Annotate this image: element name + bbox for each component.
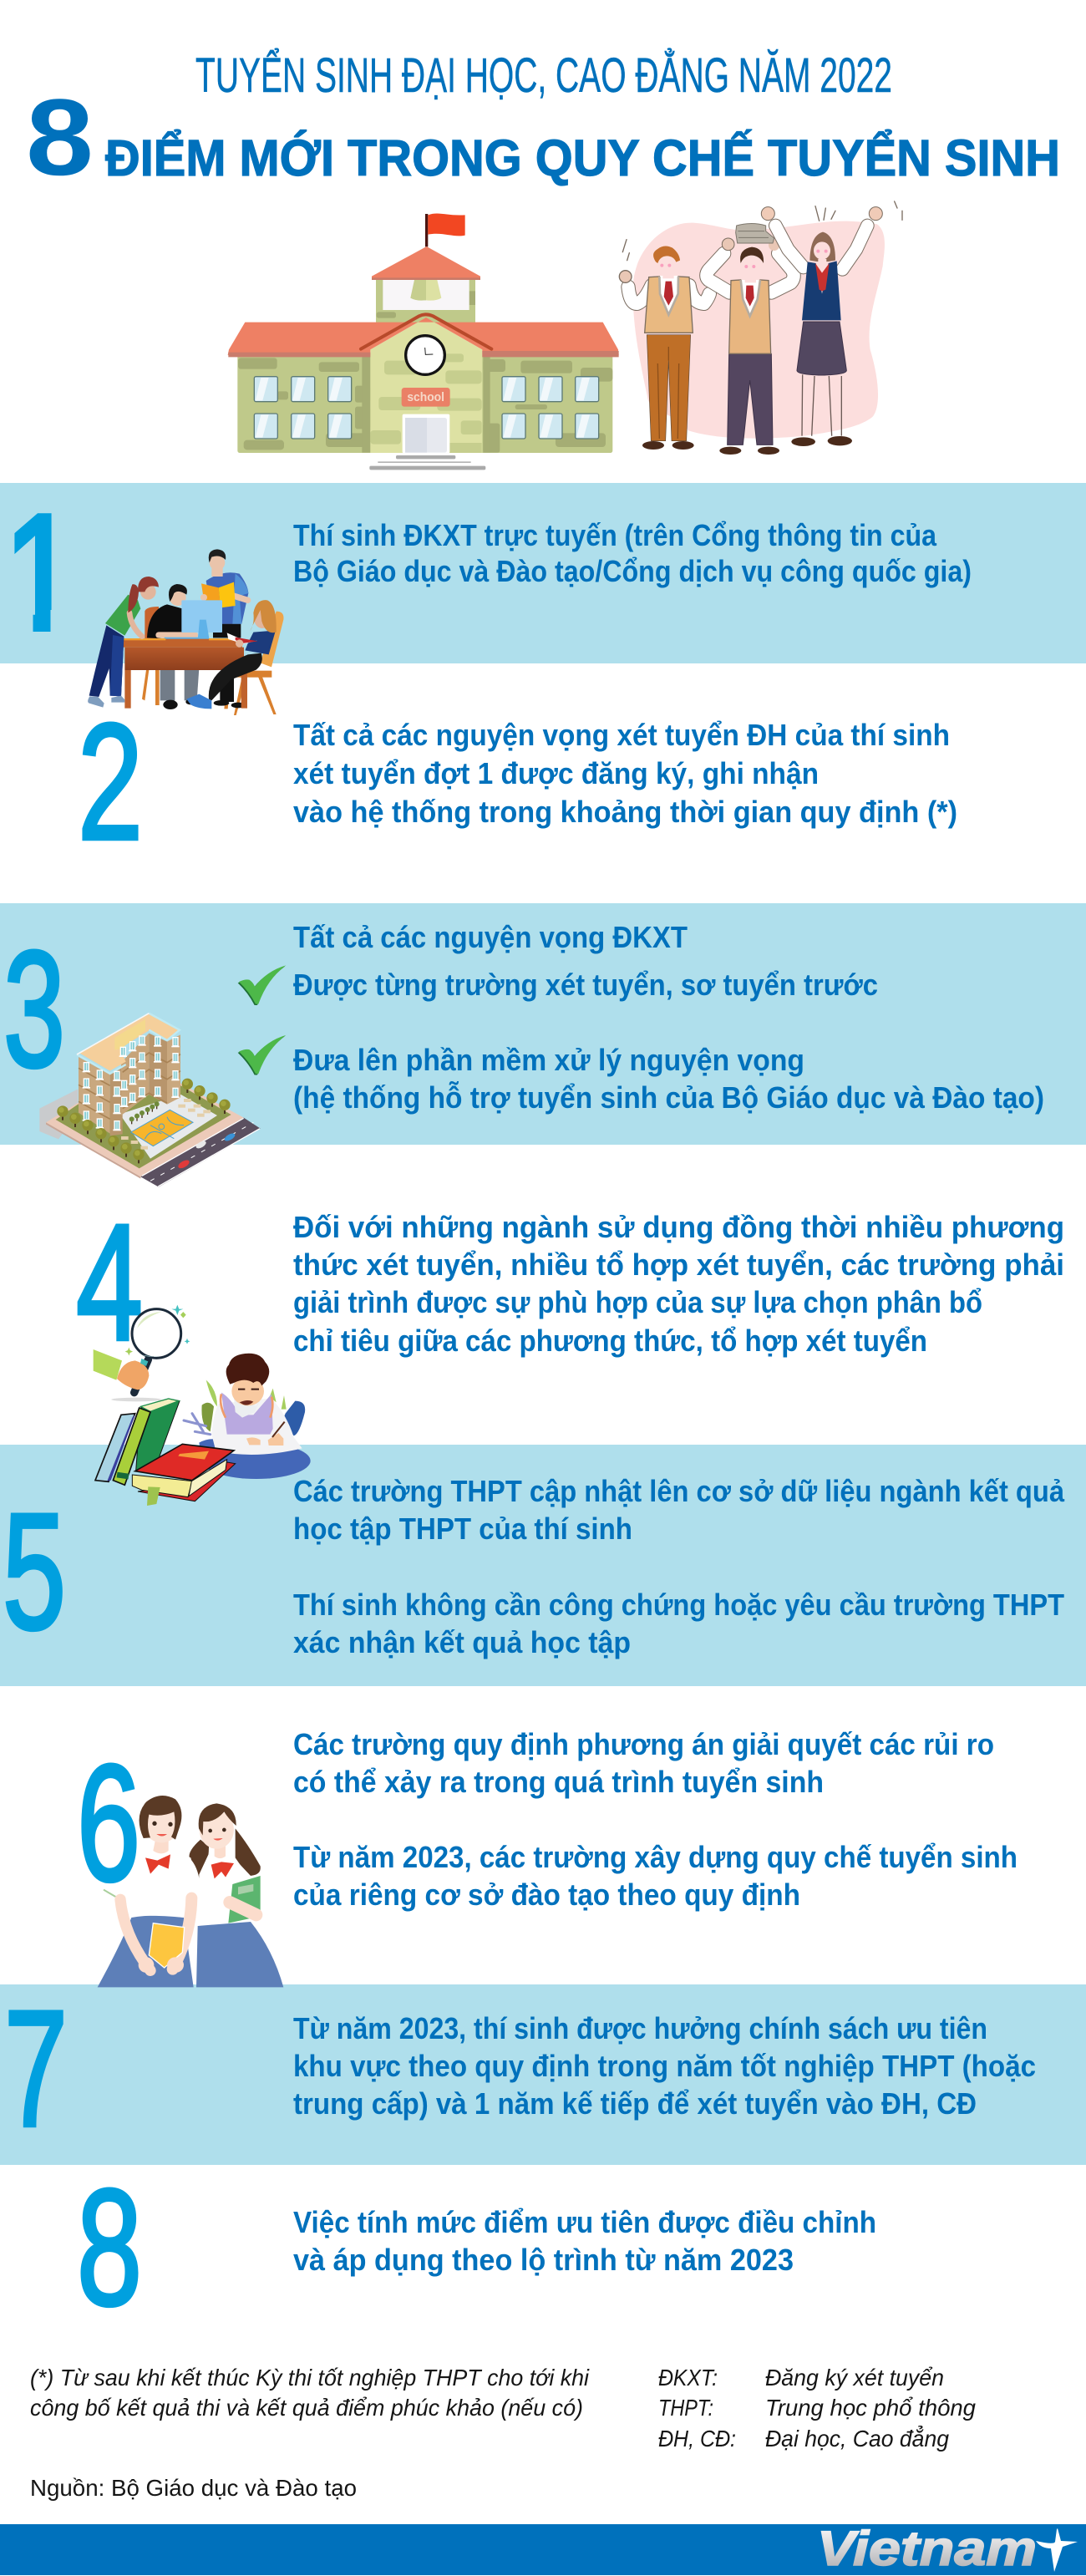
text block 1: Thí sinh ĐKXT trực tuyến (trên Cổng thông tin của [293,518,937,552]
number 4: 4 [76,1190,143,1374]
logo: Vietnam+: Vietnam [817,2522,1037,2576]
text block 1 [293,518,972,588]
text block 7: Từ năm 2023, thí sinh được hưởng chính sách ưu tiên [293,2011,987,2045]
abbreviations legend: THPT: [658,2395,713,2421]
text block 2: vào hệ thống trong khoảng thời gian quy định (*) [293,795,957,829]
text block 1: Bộ Giáo dục và Đào tạo/Cổng dịch vụ công quốc gia) [293,554,972,588]
illustration: magnifier, books and student writing [94,1305,311,1506]
text block 4: chỉ tiêu giữa các phương thức, tổ hợp xét tuyển [293,1324,927,1358]
title: main heading: ĐIỂM MỚI TRONG QUY CHẾ TUYỂN SINH [105,130,1060,186]
abbreviations legend: ĐH, CĐ: [658,2426,736,2452]
boy 1 [647,335,691,441]
abbreviations legend: Đại học, Cao đẳng [765,2425,949,2452]
books [95,1414,135,1481]
text block 6: của riêng cơ sở đào tạo theo quy định [293,1877,800,1912]
woman left [89,625,124,697]
footnote [30,2365,590,2421]
man sitting [160,668,175,700]
text block 5: xác nhận kết quả học tập [293,1625,631,1659]
text block 5 [293,1474,1065,1659]
illustration: school building [228,214,619,470]
number 5: 5 [3,1479,66,1664]
illustration: school building: school [407,391,444,404]
text block 6 [293,1727,1017,1912]
right girl [189,1840,209,1882]
abbreviations legend: Đăng ký xét tuyển [765,2365,944,2391]
text block 4 [293,1210,1064,1358]
number 2: 2 [78,689,143,874]
icon: green check mark [238,1035,286,1075]
student [206,1380,217,1406]
panel band: point 7 [0,1984,1086,2165]
monitor [181,600,222,633]
panel band: point 3 [0,903,1086,1145]
text block 2: xét tuyển đợt 1 được đăng ký, ghi nhận [293,756,819,790]
text block 3: Đưa lên phần mềm xử lý nguyện vọng [293,1043,804,1077]
panel band: point 5 [0,1445,1086,1686]
number 6: 6 [77,1730,140,1915]
point 7 [4,1976,1036,2161]
text block 5: học tập THPT của thí sinh [293,1512,632,1546]
footnote: công bố kết quả thi và kết quả điểm phúc khảo (nếu có) [30,2395,583,2421]
footer bar [0,2524,1086,2575]
number 8: 8 [77,2155,142,2340]
illustration: group studying at a table [88,549,283,715]
text block 7: khu vực theo quy định trong năm tốt nghiệp THPT (hoặc [293,2049,1036,2083]
illustration: two schoolgirls [98,1796,283,1987]
point 6 [77,1727,1017,1987]
text block 3: Được từng trường xét tuyển, sơ tuyển trước [293,968,878,1002]
text block 8 [293,2205,876,2277]
woman right [209,653,262,700]
text block 3: Tất cả các nguyện vọng ĐKXT [293,920,688,954]
text block 8: Việc tính mức điểm ưu tiên được điều chỉnh [293,2205,876,2239]
point 2 [78,689,957,874]
abbreviations legend: ĐKXT: [658,2365,718,2391]
panel band: point 1 [0,483,1086,663]
illustration: three cheering students [619,201,902,455]
text block 3 [293,920,1044,1115]
text block 4: thức xét tuyển, nhiều tổ hợp xét tuyển, các trường phải [293,1247,1064,1282]
point 3 [3,917,1044,1187]
point 1 [4,480,972,715]
abbreviations legend [658,2365,976,2452]
footnote: (*) Từ sau khi kết thúc Kỳ thi tốt nghiệp THPT cho tới khi [30,2365,590,2391]
text block 7 [293,2011,1036,2121]
left girl [98,1915,194,1987]
text block 6: Các trường quy định phương án giải quyết các rủi ro [293,1727,994,1761]
text block 2: Tất cả các nguyện vọng xét tuyển ĐH của thí sinh [293,718,950,752]
text block 4: giải trình được sự phù hợp của sự lựa chọn phân bổ [293,1285,982,1319]
icon: green check mark [238,965,286,1005]
illustration: isometric school campus [39,1014,261,1187]
text block 7: trung cấp) và 1 năm kế tiếp để xét tuyển vào ĐH, CĐ [293,2086,977,2121]
point 4 [76,1190,1064,1506]
point 5 [3,1474,1065,1664]
abbreviations legend: Trung học phổ thông [765,2395,976,2421]
number 1: 1 [4,480,78,665]
number 3: 3 [3,917,65,1101]
text block 8: và áp dụng theo lộ trình từ năm 2023 [293,2243,794,2277]
title: big number 8: 8 [26,76,94,198]
girl [802,374,841,436]
point 8 [77,2155,876,2340]
boy 2 [728,353,773,445]
text block 2 [293,718,957,829]
table [114,639,242,648]
text block 3: (hệ thống hỗ trợ tuyển sinh của Bộ Giáo dục và Đào tạo) [293,1080,1044,1115]
text block 6: Từ năm 2023, các trường xây dựng quy chế tuyển sinh [293,1840,1017,1874]
building faces [79,1057,110,1134]
text block 6: có thể xảy ra trong quá trình tuyển sinh [293,1765,824,1799]
number 7: 7 [4,1976,68,2161]
text block 4: Đối với những ngành sử dụng đồng thời nhiều phương [293,1210,1064,1244]
source line: Nguồn: Bộ Giáo dục và Đào tạo [30,2475,357,2501]
